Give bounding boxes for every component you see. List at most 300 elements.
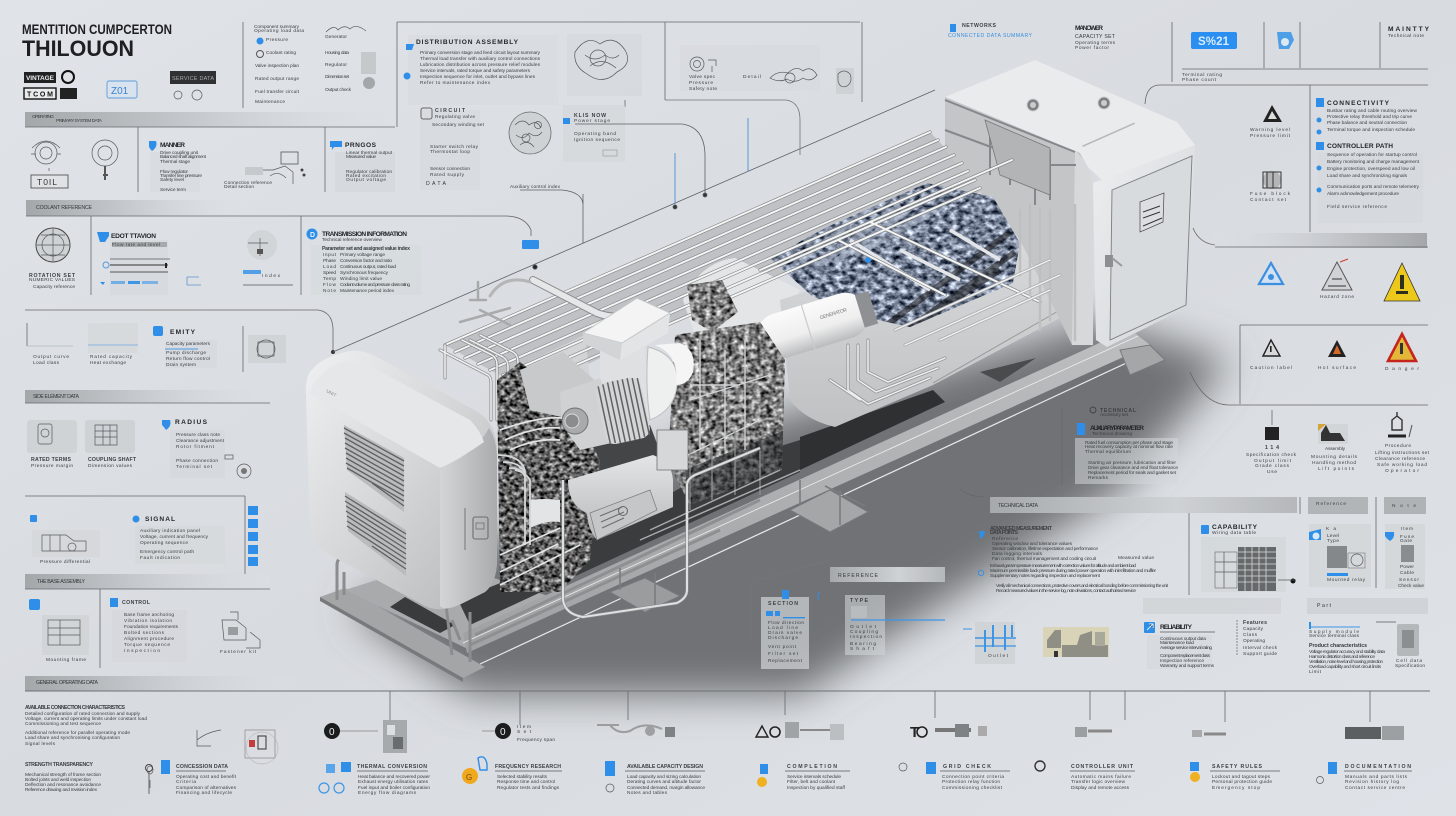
bottom block: frequency research: Response time and control <box>497 779 555 785</box>
panel: manner: MANNER <box>160 142 185 149</box>
bottom block: connection: AVAILABLE CONNECTION CHARACTERISTICS <box>25 705 126 711</box>
panel: upper center text and drawings <box>404 34 642 107</box>
icons: warning signs row 2: Danger <box>1385 366 1419 372</box>
panel: upper center second group: Regulating valve <box>435 114 475 120</box>
icons: warning signs row 1: Hazard zone <box>1320 294 1354 300</box>
panel: right service icons: 114 <box>1265 445 1279 451</box>
panel: left row 3: Rated capacity <box>90 354 133 360</box>
panel: manner: Detail section <box>224 184 254 190</box>
header band: left 1: OPERATING <box>32 114 54 120</box>
header band: right panels: Note <box>1392 503 1416 509</box>
bottom block: concession: Comparison of alternatives <box>176 785 237 791</box>
panel: capability chart: CAPABILITY <box>1212 524 1258 531</box>
panel: left row 3: Output curve <box>33 354 69 360</box>
header band: left 2: COOLANT REFERENCE <box>36 205 93 211</box>
panel: right safety top: Fuse block <box>1250 191 1291 197</box>
panel: right bottom module: Overload capability and short circuit limits <box>1309 664 1382 670</box>
panel: center lower module: Drain valve <box>768 630 802 636</box>
panel: capability chart <box>1201 524 1296 592</box>
panel: center lower module: Inspection <box>850 634 882 640</box>
panel: center lower module: Bearing <box>850 641 876 647</box>
bottom block: frequency research: Set <box>517 729 532 735</box>
panel: edot: Index <box>262 273 281 279</box>
panel: upper center second group: Starter switch relay <box>430 144 479 150</box>
header band: center lower: REFERENCE <box>838 573 879 579</box>
panel: center lower module: Flow direction <box>768 620 804 626</box>
panel: left row 3: Return flow control <box>166 356 210 362</box>
panel: right bottom module: Ventilation, noise level and housing protection <box>1309 659 1383 665</box>
panel: right service icons: Operator <box>1385 468 1419 474</box>
panel: center lower module: SECTION <box>768 601 798 607</box>
panel: flow notes: KLIS NOW <box>574 113 606 119</box>
panel: top list: Dimension set <box>325 74 350 80</box>
top right badges <box>948 22 1430 83</box>
panel: side modules: Type <box>1327 538 1339 544</box>
panel: side modules: Check value <box>1398 583 1424 589</box>
header band: bottom: GENERAL OPERATING DATA <box>36 680 99 686</box>
panel: flow notes: Ignition sequence <box>574 137 620 143</box>
panel: right bottom module: Supply module <box>1309 629 1359 635</box>
panel: right service icons <box>1190 372 1430 475</box>
machine: front engine detail <box>490 278 800 617</box>
panel: upper center second group: CIRCUIT <box>435 108 466 114</box>
panel: advanced measurement text: Supplementary notes regarding inspection and replacement <box>990 573 1101 579</box>
panel: left row 4 <box>25 419 251 496</box>
panel: left row 6: CONTROL <box>122 600 151 606</box>
bottom block: capacity design: Connected demand, margin allowance <box>627 785 705 791</box>
machine: white capsule tank: GENERATOR <box>819 307 848 321</box>
panel: manner: Connection reference <box>224 180 272 186</box>
panel: left row 3 <box>25 310 335 372</box>
panel: advanced measurement text: Exhaust gas temperature measurement with correction values for altitude and ambient load <box>990 563 1136 569</box>
panel: left row 5: Emergency control path <box>140 549 194 555</box>
bottom block: concession: Criteria <box>176 779 196 785</box>
bottom block: documentation: DOCUMENTATION <box>1345 764 1411 770</box>
panel: accessory notes: Heat recovery capacity at nominal flow rate <box>1085 444 1173 450</box>
bottom block: connection: Reference drawing and revision index <box>25 787 98 793</box>
bottom block: connection: STRENGTH TRANSPARENCY <box>25 762 94 768</box>
bottom block: connection <box>25 705 147 793</box>
panel: upper right drawings <box>665 22 862 102</box>
panel: upper center second group: Rated supply <box>430 172 465 178</box>
bottom block: connection: Bolted joints and weld inspection <box>25 777 91 783</box>
top right badges: MAINTTY <box>1388 26 1430 33</box>
panel: side modules: Level <box>1327 533 1339 539</box>
bottom block: frequency research: FREQUENCY RESEARCH <box>495 764 561 770</box>
panel: manner: Thermal stage <box>160 159 190 165</box>
panel: right bottom module: Specification <box>1395 663 1425 669</box>
panel: right bottom module: Limit <box>1309 669 1322 675</box>
panel: right safety top: CONTROLLER PATH <box>1327 143 1393 150</box>
panel: accessory notes: Technical drawing <box>1092 431 1132 437</box>
panel: left row 6: Bolted sections <box>124 630 165 636</box>
panel: blue module: Warranty and support terms <box>1160 663 1215 669</box>
panel: left row 3: Capacity parameters <box>166 341 211 347</box>
panel: transmission table: Speed <box>323 270 336 276</box>
panel: left row 6: Mounting frame <box>46 657 86 663</box>
panel: piping diagram: Outlet <box>988 653 1009 659</box>
panel: prngos: PRNGOS <box>345 142 377 149</box>
bottom block: concession <box>146 760 237 796</box>
header band: left 4 <box>25 390 270 403</box>
panel: right safety top: Communication ports and remote telemetry <box>1327 184 1420 190</box>
machine: cabinet <box>945 60 1195 347</box>
header band: left 4: SIDE ELEMENT DATA <box>33 394 80 400</box>
bottom block: controller <box>1035 691 1135 791</box>
bottom block: capacity design: Derating curves and altitude factor <box>627 779 701 785</box>
machine: engine cutaway <box>771 183 1019 327</box>
machine: front radiator box: UNIT <box>326 388 337 398</box>
bottom block: grid check: Connection point criteria <box>942 774 1004 780</box>
panel: left row 3: Drain system <box>166 362 196 368</box>
panel: left row 4: Dimension values <box>88 463 133 469</box>
panel: accessory notes: Replacement period for seals and gasket set <box>1088 470 1177 476</box>
header band: left 2 <box>26 200 531 236</box>
panel: left row 6: Torque sequence <box>124 642 170 648</box>
panel: advanced measurement text: ADVANCED MEASUREMENT <box>990 526 1053 532</box>
panel: upper center text and drawings: Refer to maintenance index <box>420 80 491 86</box>
panel: upper center second group: Thermostat loop <box>430 149 470 155</box>
top right badges: S%21 <box>1198 36 1230 48</box>
panel: right service icons: Lifting instructions set <box>1375 450 1430 456</box>
panel: upper right drawings: Pressure <box>689 80 713 86</box>
panel: upper center text and drawings: Thermal load transfer with auxiliary control connections <box>420 56 541 62</box>
panel: upper center text and drawings: Inspection sequence for inlet, outlet and bypass lines <box>420 74 536 80</box>
icons: warning signs row 2: Hot surface <box>1318 365 1356 371</box>
panel: blue module: Capacity <box>1243 626 1264 632</box>
machine: white capsule tank <box>751 285 880 365</box>
bottom block: maintenance steps: Service intervals schedule <box>787 774 841 780</box>
top right badges: Technical note <box>1388 33 1424 39</box>
bottom block: maintenance steps <box>756 691 850 791</box>
panel: accessory notes: Remarks <box>1088 475 1109 481</box>
panel: center lower module: Coupling <box>850 629 878 635</box>
bottom block: maintenance steps: COMPLETION <box>787 764 837 770</box>
bottom block: frequency research: Regulator tests and findings <box>497 785 560 791</box>
panel: left row 3: Pump discharge <box>166 350 206 356</box>
panel: blue module <box>1143 598 1281 669</box>
bottom block: documentation: Manuals and parts lists <box>1345 774 1408 780</box>
panel: piping diagram <box>963 622 1016 664</box>
panel: side modules: Gate <box>1400 538 1412 544</box>
panel: flow notes <box>563 105 625 162</box>
header band: right panels: TECHNICAL DATA <box>998 503 1039 509</box>
panel: right service icons: Grade class <box>1255 463 1290 469</box>
header band: bottom <box>25 676 1430 691</box>
panel: transmission table: Note <box>323 288 336 294</box>
panel: flow notes: Operating band <box>574 131 616 137</box>
panel: upper right drawings: Detail <box>743 74 761 80</box>
panel: blue module: Continuous output data <box>1160 636 1206 642</box>
top right badges: Operating terms <box>1075 40 1116 46</box>
panel: right bottom module: Service terminal class <box>1309 633 1360 639</box>
panel: right safety top: Sequence of operation for startup control <box>1327 152 1417 158</box>
panel: top list: Regulator <box>325 62 347 68</box>
panel: upper center text and drawings: Service intervals, rated torque and safety parameters <box>420 68 531 74</box>
panel: top list: Rated output range <box>255 76 299 82</box>
bottom block: capacity design: Notes and tables <box>627 790 668 796</box>
panel: blue module: Inspection reference <box>1160 658 1204 664</box>
bottom block: safety <box>1125 691 1280 791</box>
bottom block: connection: Deflection and resonance avoidance <box>25 782 101 788</box>
panel: blue module: Features <box>1243 620 1267 626</box>
panel: side modules: Item <box>1401 526 1413 532</box>
panel: upper center second group: Sensor connection <box>430 166 470 172</box>
panel: upper center text and drawings: DISTRIBUTION ASSEMBLY <box>416 39 519 46</box>
top right badges: Terminal rating <box>1182 72 1222 78</box>
panel: transmission table: Input <box>323 252 337 258</box>
panel: left row 4: COUPLING SHAFT <box>88 457 137 463</box>
panel: left row 4: RATED TERMS <box>31 457 72 463</box>
bottom block: safety: SAFETY RULES <box>1212 764 1263 770</box>
panel: prngos: Measured value <box>346 154 376 160</box>
panel: top list <box>243 22 376 108</box>
panel: transmission table: Technical reference overview <box>322 237 383 243</box>
bottom block: controller: Display and remote access <box>1071 785 1130 791</box>
panel: upper center second group: Auxiliary control index <box>510 184 561 190</box>
panel: upper center text and drawings: Primary conversion stage and feed circuit layout summary <box>420 50 541 56</box>
panel: transmission table: Temp <box>323 276 336 282</box>
panel: center lower module <box>761 590 945 669</box>
bottom block: thermal conversion: THERMAL CONVERSION <box>357 764 427 770</box>
panel: top list: Fuel transfer circuit <box>255 89 300 95</box>
top right badges: CAPACITY SET <box>1075 34 1116 40</box>
bottom block: concession: Operating cost and benefit <box>176 774 237 780</box>
panel: prngos: Linear thermal output <box>346 150 393 156</box>
panel: manner: Service term <box>160 187 186 193</box>
panel: transmission table: Parameter set and assigned value index <box>322 246 410 252</box>
bottom block: grid check: GRID CHECK <box>943 764 991 770</box>
ground shadow <box>350 320 1230 695</box>
panel: transmission table: Continuous output, rated load <box>340 264 396 270</box>
panel: top list: Coolant rating <box>266 50 296 56</box>
bottom block: connection: Additional reference for parallel operating mode <box>25 730 130 736</box>
bottom block: frequency research: Frequency span <box>517 737 555 743</box>
panel: top list: Valve inspection plan <box>255 63 299 69</box>
panel: right safety top: Engine protection, overspeed and low oil <box>1327 166 1415 172</box>
panel: right safety top: CONNECTIVITY <box>1327 100 1390 107</box>
top right badges: NETWORKS <box>962 23 997 29</box>
panel: advanced measurement text: Maximum permissible back pressure during rated power operation with inlet filtration and muffler <box>990 568 1156 574</box>
panel: top list: Maintenance <box>255 99 285 105</box>
panel: right safety top: Battery monitoring and charge management <box>1327 159 1420 165</box>
bottom block: concession: CONCESSION DATA <box>176 764 228 770</box>
panel: globe <box>29 216 91 295</box>
header band: right panels: Reference <box>1316 501 1346 507</box>
panel: manner: Drive coupling unit <box>160 150 199 156</box>
panel: advanced measurement text: Operating window and tolerance values <box>992 541 1073 547</box>
panel: right service icons: Clearance reference <box>1375 456 1425 462</box>
panel: blue module: Class <box>1243 632 1258 638</box>
panel: left row 4: Rotor fitment <box>176 444 215 450</box>
header band: right panels <box>960 489 1426 588</box>
panel: right service icons: Safe working load <box>1377 462 1427 468</box>
panel: right safety top: Alarm acknowledgement procedure <box>1327 191 1399 197</box>
panel: transmission table: D <box>310 232 315 239</box>
panel: side modules: Cable <box>1400 570 1414 576</box>
panel: globe: NUMERIC VALUES <box>29 277 75 283</box>
panel: left row 4: RADIUS <box>175 419 208 426</box>
top right badges: MANOWER <box>1075 25 1103 32</box>
panel: right service icons: Mounting details <box>1311 454 1358 460</box>
header band: left 1 <box>25 112 395 127</box>
panel: center lower module: Replacement <box>768 658 803 664</box>
bottom block: maintenance steps: Filter, belt and coolant <box>787 779 836 785</box>
panel: left row 6 <box>29 589 260 668</box>
panel: right safety top: Pressure limit <box>1250 133 1291 139</box>
panel: center lower module: Load line <box>768 625 798 631</box>
panel: center lower module: TYPE <box>850 598 869 604</box>
panel: top list: Housing data <box>325 50 349 56</box>
title badges: SERVICE DATA <box>172 76 214 82</box>
panel: right safety top: Busbar rating and cable routing overview <box>1327 108 1418 114</box>
header band: left 1: PRIMARY SYSTEM DATA <box>56 118 103 124</box>
panel: side modules: Sensor <box>1399 577 1419 583</box>
bottom block: frequency research <box>462 691 562 791</box>
panel: right service icons: Handling method <box>1312 460 1356 466</box>
panel: left row 6: Vibration isolation <box>124 618 172 624</box>
header band: left 6 <box>25 574 270 589</box>
panel: left row 1: T0IL <box>37 177 57 187</box>
bottom block: drawing 1 <box>147 730 278 788</box>
panel: advanced measurement text: Fan control, thermal management and cooling circuit <box>992 556 1097 562</box>
bottom block: capacity design: AVAILABLE CAPACITY DESIGN <box>627 764 703 770</box>
bottom block: connection: Mechanical strength of frame section <box>25 772 101 778</box>
title badges: VINTAGE <box>26 75 55 82</box>
panel: transmission table: Load <box>323 264 336 270</box>
panel: edot: EDOT TTAVION <box>111 233 156 240</box>
bottom block: safety: Lockout and tagout steps <box>1212 774 1271 780</box>
panel: center lower module: Vent point <box>768 644 797 650</box>
panel: accessory notes: AUXILIARY PARAMETER <box>1090 425 1144 432</box>
bottom block: controller: CONTROLLER UNIT <box>1071 764 1134 770</box>
icons: warning signs row 2 <box>1240 325 1428 404</box>
panel: top list: Component summary <box>254 24 300 30</box>
panel: left row 5: SIGNAL <box>145 516 175 523</box>
bottom block: connection: Commissioning and test sequence <box>25 721 101 727</box>
panel: right safety top: Protective relay threshold and trip curve <box>1327 114 1412 120</box>
panel: right bottom module: Harmonic distortion class and reference <box>1309 654 1375 660</box>
panel: transmission table: Flow <box>323 282 337 288</box>
panel: right bottom module: Voltage regulator accuracy and stability data <box>1309 649 1385 655</box>
panel: advanced measurement text <box>978 513 1189 595</box>
panel: blue module: Operating <box>1243 638 1265 644</box>
panel: right service icons: Assembly <box>1325 446 1346 452</box>
panel: top list: Generator <box>325 34 347 40</box>
panel: accessory notes: Accessory set <box>1100 412 1129 418</box>
panel: left row 1 <box>25 127 395 192</box>
bottom block: frequency research: 0 <box>500 727 506 738</box>
panel: accessory notes: TECHNICAL <box>1100 408 1137 414</box>
top right badges: Phase count <box>1182 77 1217 83</box>
panel: right safety top: Load share and synchronizing signals <box>1327 173 1408 179</box>
panel: left row 4: Pressure margin <box>31 463 73 469</box>
panel: left row 5: Pressure differential <box>40 559 90 565</box>
bottom block: thermal conversion: Exhaust energy utilisation rates <box>358 779 429 785</box>
panel: right safety top: Field service reference <box>1327 204 1387 210</box>
image: plant photo <box>1043 627 1109 657</box>
panel: manner: Transfer line pressure <box>160 173 202 179</box>
panel: upper center second group: Secondary winding set <box>432 122 485 128</box>
bottom block: thermal conversion: Energy flow diagrams <box>358 790 417 796</box>
bottom block: connection: Voltage, current and operating limits under constant load <box>25 716 147 722</box>
panel: transmission table: Conversion factor and ratio <box>340 258 392 264</box>
panel: accessory notes: Starting air pressure, lubrication and filter <box>1088 460 1176 466</box>
panel: left row 4: Terminal set <box>176 464 213 470</box>
panel: prngos: Regulator calibration <box>346 169 392 175</box>
bottom block: controller: Transfer logic overview <box>1071 779 1126 785</box>
bottom block: thermal conversion: Heat balance and recovered power <box>358 774 430 780</box>
panel: left row 3: Load class <box>33 360 60 366</box>
panel: left row 3: Heat exchange <box>90 360 126 366</box>
bottom block: thermal conversion: Fuel input and boiler configuration <box>358 785 430 791</box>
panel: left row 4: Pressure class note <box>176 432 220 438</box>
panel: right bottom module: Part <box>1317 603 1332 609</box>
bottom block: frequency research: G <box>466 773 472 782</box>
panel: accessory notes <box>1062 407 1178 485</box>
panel: transmission table: Maintenance period index <box>340 288 395 294</box>
panel: edot: Flow rate and level <box>112 242 160 248</box>
panel: left row 3: EMITY <box>170 329 196 336</box>
leader lines from machine <box>333 90 935 352</box>
panel: left row 6: Fastener kit <box>220 649 257 655</box>
panel: center lower module: Filter set <box>768 651 799 657</box>
bottom block: maintenance steps: Inspection by qualified staff <box>787 785 846 791</box>
panel: right safety top: Contact set <box>1250 197 1287 203</box>
panel: left row 5: Fault indication <box>140 555 180 561</box>
panel: side modules: Ka <box>1326 526 1336 532</box>
panel: transmission table: Primary voltage range <box>340 252 385 258</box>
panel: advanced measurement text: Measured value <box>1118 555 1154 561</box>
panel: upper right drawings: Valve spec <box>689 74 716 80</box>
panel: top list: Output check <box>325 87 352 93</box>
panel: flow notes: Power stage <box>574 118 610 124</box>
panel: upper center text and drawings: Lubrication distribution across pressure relief modules <box>420 62 541 68</box>
panel: manner: Balanced shaft alignment <box>160 154 207 160</box>
panel: right safety top: Terminal torque and inspection schedule <box>1327 127 1415 133</box>
panel: accessory notes: Drive gear clearance and end float tolerance <box>1088 465 1178 471</box>
bottom block: frequency research: Item <box>517 724 531 730</box>
bottom block: capacity design <box>597 691 705 796</box>
bottom block: capacity design: Load capacity and sizing calculation <box>627 774 701 780</box>
panel: transmission table: Winding limit value <box>340 276 382 282</box>
bottom block: connection: Load share and synchronising configuration <box>25 735 120 741</box>
bottom block: concession: Financing and lifecycle <box>176 790 232 796</box>
panel: right service icons: Procedure <box>1385 443 1411 449</box>
machine: lower housing <box>445 132 1075 427</box>
panel: side modules: Power <box>1400 564 1414 570</box>
panel: capability chart: Wiring data table <box>1212 530 1256 536</box>
panel: center lower module: Shaft <box>850 646 875 652</box>
title badges <box>24 71 216 100</box>
header band: left 6: THE BASE ASSEMBLY <box>37 579 86 585</box>
machine: front radiator box <box>306 351 497 609</box>
icons: warning signs row 1 <box>1259 259 1420 301</box>
panel: globe: ROTATION SET <box>29 273 76 279</box>
panel: side modules: Fuse <box>1400 534 1414 540</box>
panel: left row 5: Auxiliary indication panel <box>140 528 200 534</box>
panel: advanced measurement text: Sensor calibration, lifetime expectation and performance <box>992 546 1098 552</box>
title <box>22 22 172 61</box>
panel: right bottom module <box>1307 598 1428 675</box>
panel: right service icons: Output limit <box>1254 458 1292 464</box>
bottom block: grid check <box>899 691 1010 791</box>
panel: blue module: Support guide <box>1243 651 1277 657</box>
title: THILOUON <box>22 36 134 61</box>
panel: prngos <box>330 141 395 192</box>
header band: right safety <box>1193 228 1428 248</box>
icons: warning signs row 2: Caution label <box>1250 365 1292 371</box>
